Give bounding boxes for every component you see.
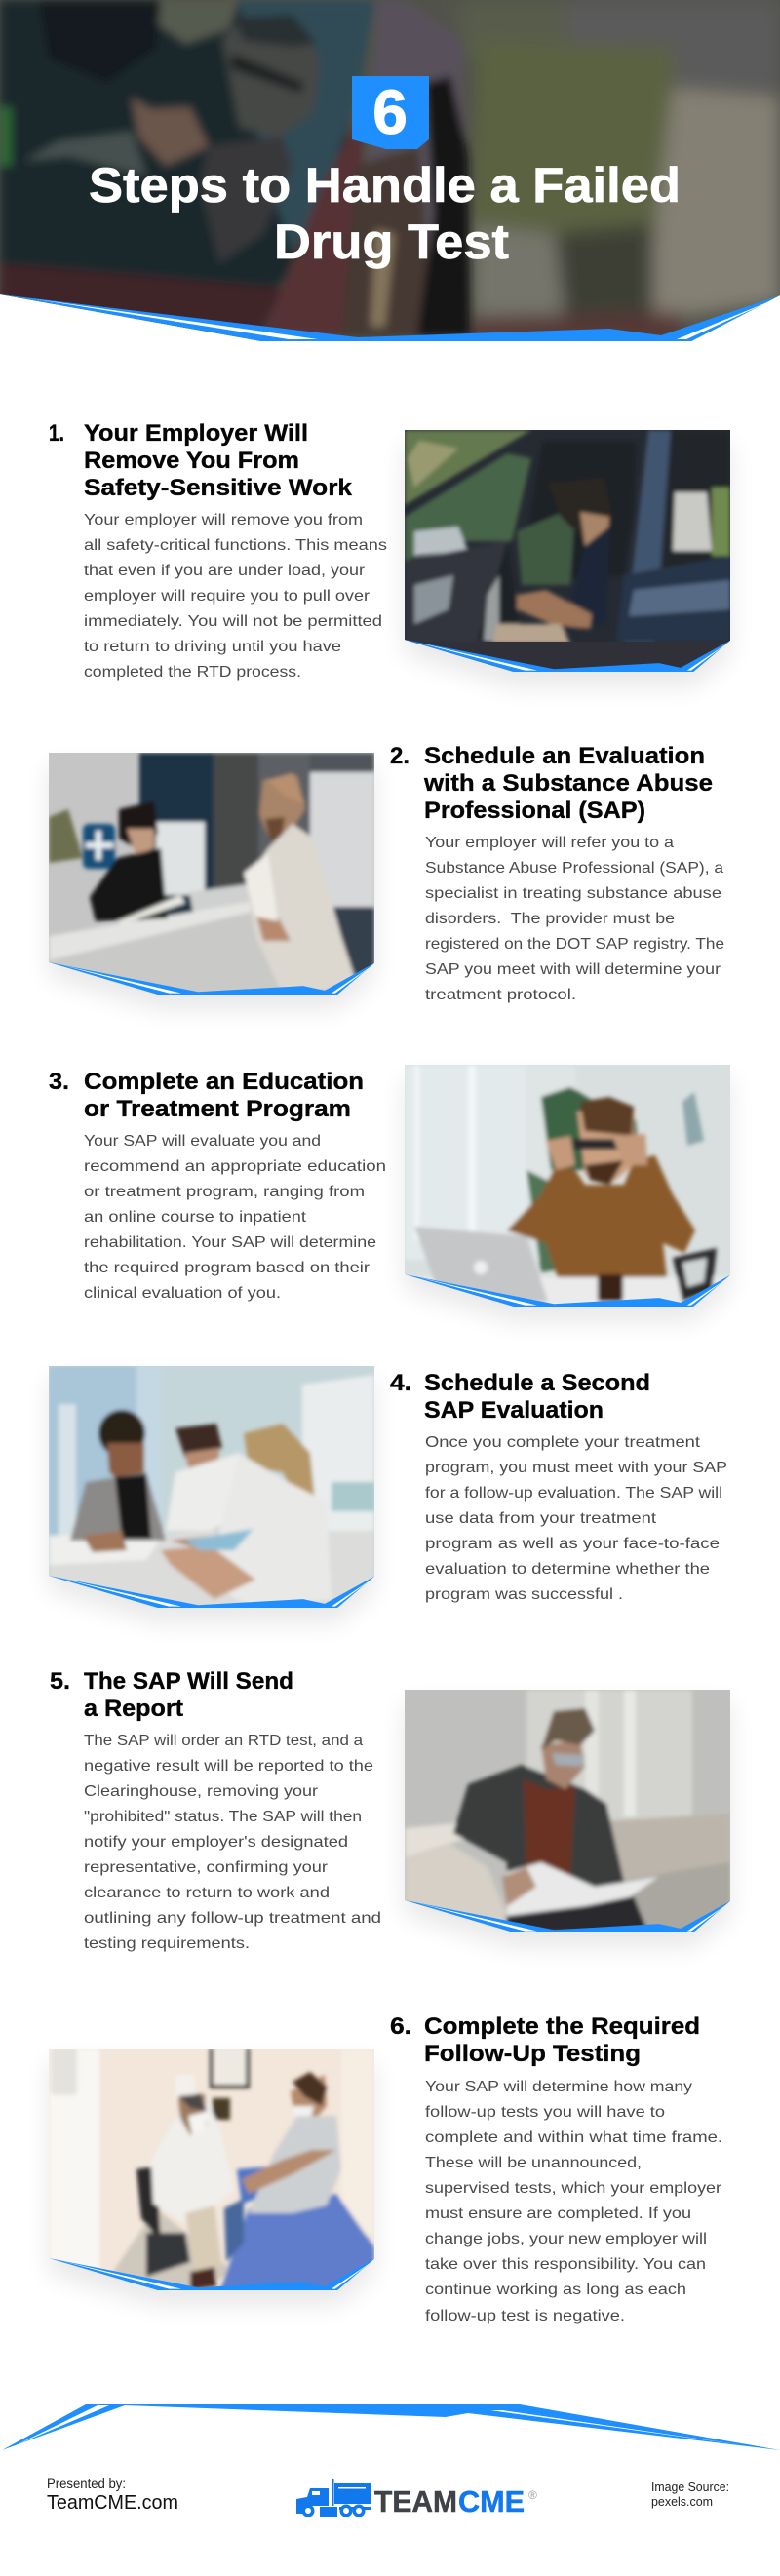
step 5 wave (405, 1900, 730, 1932)
footer: image source (651, 2479, 729, 2509)
hero banner (0, 0, 780, 351)
step 4 heading (390, 1370, 650, 1424)
footer: image source: Image Source: (651, 2479, 729, 2494)
title: Steps to Handle a Failed (89, 158, 681, 213)
step 6 photo shadow (49, 2062, 374, 2305)
step 3 text: the required program based on their (84, 1260, 370, 1276)
step 6 heading: 6. (390, 2013, 411, 2040)
step 5 photo: man reading papers on a sofa (405, 1690, 730, 1932)
step 6 text: take over this responsibility. You can (425, 2256, 706, 2273)
number badge (352, 76, 429, 149)
step 2 heading (390, 743, 713, 824)
step 6 text: complete and within what time frame. (425, 2129, 722, 2146)
step 5 text: notify your employer's designated (84, 1834, 348, 1851)
footer: Team CME logo (296, 2479, 537, 2518)
step 1 text: employer will require you to pull over (84, 588, 370, 605)
step 3 heading: Complete an Education (84, 1069, 364, 1095)
step 1 text (84, 512, 387, 681)
step 6 heading (390, 2013, 700, 2067)
step 1 text: immediately. You will not be permitted (84, 613, 382, 630)
title: Drug Test (274, 215, 509, 269)
step 5 text: "prohibited" status. The SAP will then (84, 1809, 362, 1825)
step 6 text: Your SAP will determine how many (425, 2079, 692, 2095)
step 5 heading: a Report (84, 1696, 183, 1722)
step 5 text: representative, confirming your (84, 1859, 329, 1876)
step 3 text: clinical evaluation of you. (84, 1285, 281, 1302)
step 4 text: program was successful . (425, 1586, 623, 1603)
step 4 heading: SAP Evaluation (424, 1397, 604, 1424)
step 2 heading: with a Substance Abuse (423, 770, 713, 797)
footer blue wave (2, 2404, 780, 2450)
step 3 text: or treatment program, ranging from (84, 1184, 365, 1200)
title (89, 158, 681, 269)
step 5 heading (50, 1668, 293, 1722)
step 3 wave (405, 1274, 730, 1307)
step 3 heading: 3. (49, 1069, 69, 1095)
wordmark: TEAM: TEAM (374, 2484, 457, 2518)
step 2 heading: 2. (390, 743, 410, 769)
step 2 text: registered on the DOT SAP registry. The (425, 936, 724, 953)
step 1 text: all safety-critical functions. This means (84, 537, 387, 554)
step 6 text (425, 2079, 722, 2324)
step 3 photo shadow (405, 1078, 730, 1321)
step 3 text: recommend an appropriate education (84, 1158, 386, 1175)
footer: presented by: TeamCME.com (47, 2492, 178, 2514)
step 4 text: program, you must meet with your SAP (425, 1460, 727, 1476)
wordmark: CME: CME (458, 2484, 525, 2518)
step 3 heading (49, 1069, 364, 1122)
step 2 text (425, 835, 724, 1003)
step 3 text: Your SAP will evaluate you and (84, 1133, 321, 1150)
step 4 wave (49, 1576, 374, 1608)
step 6 text: follow-up test is negative. (425, 2308, 625, 2324)
step 4 text: program as well as your face-to-face (425, 1536, 720, 1552)
step 6 text: change jobs, your new employer will (425, 2231, 707, 2247)
step 5 heading: 5. (50, 1668, 70, 1695)
step 3 text: an online course to inpatient (84, 1209, 307, 1226)
step 1 heading: Your Employer Will (84, 420, 308, 447)
step 5 text: Clearinghouse, removing your (84, 1783, 319, 1800)
step 1 photo: man in truck door (405, 430, 730, 673)
step 6 text: These will be unannounced, (425, 2155, 642, 2171)
step 2 photo shadow (49, 766, 374, 1009)
step 3 panel (49, 1065, 730, 1321)
step 2 text: disorders. The provider must be (425, 911, 675, 927)
step 6 wave (49, 2258, 374, 2290)
step 1 text: completed the RTD process. (84, 664, 301, 681)
step 6 text: must ensure are completed. If you (425, 2205, 691, 2222)
step 5 text: outlining any follow-up treatment and (84, 1910, 381, 1927)
step 4 text (425, 1434, 727, 1603)
step 1 heading: Remove You From (84, 448, 299, 474)
step 2 text: Substance Abuse Professional (SAP), a (425, 860, 723, 877)
step 2 wave (49, 962, 374, 995)
step 5 text: testing requirements. (84, 1935, 250, 1952)
number badge: 6 (372, 77, 408, 147)
registered mark: ® (528, 2488, 537, 2502)
step 6 text: follow-up tests you will have to (425, 2104, 665, 2121)
step 1 text: that even if you are under load, your (84, 563, 366, 579)
step 6 heading: Follow-Up Testing (424, 2041, 641, 2067)
step 6 heading: Complete the Required (424, 2013, 700, 2040)
step 6 photo: doctor with masked patient (49, 2049, 374, 2290)
step 4 text: evaluation to determine whether the (425, 1561, 710, 1578)
step 3 text: rehabilitation. Your SAP will determine (84, 1234, 376, 1251)
step 6 panel (49, 2013, 722, 2324)
step 4 text: Once you complete your treatment (425, 1434, 701, 1451)
icon: truck (296, 2479, 370, 2517)
step 4 text: for a follow-up evaluation. The SAP will (425, 1485, 722, 1502)
step 4 heading: Schedule a Second (424, 1370, 650, 1396)
step 1 text: to return to driving until you have (84, 639, 341, 655)
footer: presented by: Presented by: (47, 2477, 126, 2491)
step 2 text: SAP you meet with will determine your (425, 961, 722, 978)
step 3 text (84, 1133, 386, 1302)
hero photo: driver seen through windshield (0, 0, 780, 351)
step 5 text (84, 1733, 381, 1952)
step 1 photo shadow (405, 444, 730, 686)
step 2 photo: reception desk (49, 753, 374, 999)
step 3 heading: or Treatment Program (84, 1096, 351, 1122)
hero blue wave (0, 294, 780, 341)
step 2 heading: Schedule an Evaluation (424, 743, 705, 769)
step 1 heading: 1. (49, 420, 64, 447)
footer: presented by (47, 2477, 178, 2514)
step 1 heading (49, 420, 353, 501)
step 4 photo: three people at a counter (49, 1366, 374, 1608)
step 4 panel (49, 1366, 727, 1622)
step 3 photo: man adjusting glasses at laptop (405, 1065, 730, 1308)
step 2 heading: Professional (SAP) (424, 798, 645, 824)
step 4 text: use data from your treatment (425, 1510, 657, 1527)
step 2 text: Your employer will refer you to a (425, 835, 674, 851)
step 1 panel (49, 420, 730, 686)
step 5 heading: The SAP Will Send (84, 1668, 293, 1695)
step 1 heading: Safety-Sensitive Work (84, 475, 353, 501)
step 5 photo shadow (405, 1703, 730, 1947)
step 6 text: supervised tests, which your employer (425, 2180, 722, 2197)
step 2 text: specialist in treating substance abuse (425, 885, 722, 902)
footer: image source: pexels.com (651, 2494, 713, 2509)
step 4 photo shadow (49, 1380, 374, 1622)
step 5 text: clearance to return to work and (84, 1885, 330, 1901)
step 2 text: treatment protocol. (425, 987, 576, 1003)
step 4 heading: 4. (390, 1370, 411, 1396)
step 2 panel (49, 743, 724, 1009)
step 6 text: continue working as long as each (425, 2282, 686, 2298)
step 5 panel (50, 1668, 730, 1952)
step 5 text: negative result will be reported to the (84, 1758, 373, 1775)
step 5 text: The SAP will order an RTD test, and a (84, 1733, 363, 1749)
step 1 text: Your employer will remove you from (84, 512, 363, 528)
step 1 wave (405, 640, 730, 672)
